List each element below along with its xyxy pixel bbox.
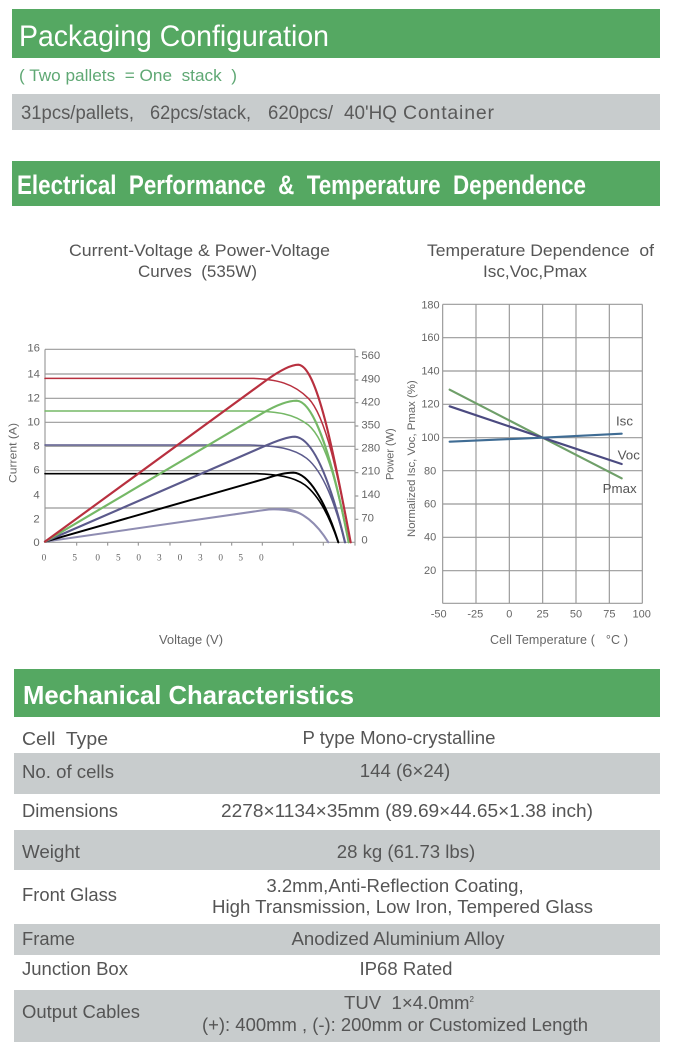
line: Voc <box>450 406 622 464</box>
axis title: normalized: Normalized Isc, Voc, Pmax (%) <box>406 380 418 537</box>
heading: packaging configuration: Packaging Configuration <box>19 20 329 53</box>
row: front glass: 3.2mm,Anti-Reflection Coating, <box>266 875 524 896</box>
left axis labels: 12 <box>27 393 40 405</box>
x axis labels: 75 <box>603 608 615 620</box>
chart title: temperature dependence <box>427 241 654 281</box>
row: output cables: Output Cables <box>22 1001 140 1022</box>
label: Pmax: Pmax <box>603 481 637 496</box>
chart title: current-voltage <box>69 241 330 281</box>
right axis labels: 560 <box>361 350 380 362</box>
grid <box>45 349 358 546</box>
x axis labels: 5 <box>72 553 77 563</box>
left axis labels: 16 <box>27 343 40 355</box>
y axis labels: 140 <box>421 365 440 377</box>
x axis labels: 50 <box>570 608 582 620</box>
row: front glass: Front Glass <box>22 884 117 905</box>
x axis labels: 0 <box>95 553 100 563</box>
chart title: current-voltage: Curves (535W) <box>138 262 257 281</box>
curve: black <box>45 473 338 542</box>
row: packing quantities: Container <box>403 102 494 124</box>
line: Isc <box>450 434 622 442</box>
right axis labels: 140 <box>361 489 380 501</box>
label: Voc: Voc <box>618 447 640 462</box>
right axis labels: 490 <box>361 373 380 385</box>
right axis labels: 70 <box>361 512 374 524</box>
text: pallet note: ( Two pallets = One stack ) <box>19 66 237 85</box>
y axis labels: 120 <box>421 399 440 411</box>
left axis labels: 8 <box>33 441 40 453</box>
x axis labels: 0 <box>218 553 223 563</box>
right axis labels: 350 <box>361 420 380 432</box>
right axis labels: 210 <box>361 466 380 478</box>
line chart: current-voltage and power-voltage curves <box>8 343 396 563</box>
chart title: temperature dependence: Temperature Dependence of <box>427 241 654 260</box>
row: cell type: Cell Type <box>22 728 108 749</box>
row: output cables: TUV 1×4.0mm <box>344 992 470 1013</box>
row: weight: Weight <box>22 841 81 862</box>
curve: red <box>45 365 351 542</box>
row: number of cells <box>14 753 660 794</box>
x axis labels: 0 <box>259 553 264 563</box>
row: packing quantities: 620pcs/ <box>268 102 334 124</box>
y axis labels: 40 <box>424 532 436 544</box>
right axis labels <box>361 350 380 547</box>
curve: purple <box>45 437 345 542</box>
panel: packaging configuration <box>12 9 660 130</box>
x axis labels: 3 <box>157 553 162 563</box>
axis title: current: Current (A) <box>8 423 20 483</box>
x axis labels: -25 <box>467 608 483 620</box>
line chart: temperature dependence <box>406 300 651 620</box>
chart title: current-voltage: Current-Voltage & Power-Voltage <box>69 241 330 260</box>
left axis labels: 2 <box>33 513 40 525</box>
row: packing quantities: 62pcs/stack, <box>150 102 251 124</box>
x axis labels: 25 <box>537 608 549 620</box>
row: output cables <box>14 990 660 1042</box>
row: dimensions <box>22 800 593 821</box>
grid <box>443 304 642 603</box>
x axis labels: 0 <box>506 608 512 620</box>
curve: 5th irradiance grey <box>45 509 328 542</box>
heading: mechanical characteristics: Mechanical Characteristics <box>23 680 354 710</box>
axis title: voltage: Voltage (V) <box>159 633 223 647</box>
left axis labels <box>27 343 40 549</box>
chart title: temperature dependence: Isc,Voc,Pmax <box>483 262 588 281</box>
row: cell type: P type Mono-crystalline <box>303 727 495 748</box>
row: frame: Frame <box>22 928 75 949</box>
x axis labels: 5 <box>116 553 121 563</box>
panel: mechanical characteristics <box>14 669 660 1042</box>
row: packing quantities: 40'HQ <box>344 102 397 124</box>
y axis labels <box>421 300 440 577</box>
axis title: power: Power (W) <box>384 428 396 480</box>
y axis labels: 100 <box>421 432 440 444</box>
label: Isc: Isc <box>616 414 633 429</box>
x axis labels: -50 <box>431 608 447 620</box>
row: junction box: Junction Box <box>22 958 129 979</box>
x axis labels: 100 <box>633 608 651 620</box>
heading: packaging configuration <box>12 9 660 58</box>
x axis labels: 0 <box>42 553 47 563</box>
y axis labels: 80 <box>424 465 436 477</box>
axis title: cell temperature: Cell Temperature ( °C ) <box>490 633 628 647</box>
left axis labels: 0 <box>33 537 40 549</box>
y axis labels: 60 <box>424 498 436 510</box>
left axis labels: 14 <box>27 369 40 381</box>
x axis labels: 5 <box>238 553 243 563</box>
row: output cables: 2 <box>470 995 475 1004</box>
row: packing quantities: 31pcs/pallets, <box>21 102 134 124</box>
row: front glass <box>22 875 593 917</box>
x axis labels: 0 <box>178 553 183 563</box>
heading: mechanical characteristics <box>14 669 660 717</box>
row: junction box: IP68 Rated <box>359 958 453 979</box>
y axis labels: 20 <box>424 565 436 577</box>
heading: electrical performance <box>12 161 660 206</box>
row: dimensions: Dimensions <box>22 800 118 821</box>
row: packing quantities <box>12 94 660 130</box>
row: output cables: (+): 400mm , (-): 200mm or Customized Length <box>202 1014 588 1035</box>
row: junction box <box>22 958 453 979</box>
row: frame <box>14 924 660 955</box>
row: number of cells: No. of cells <box>22 761 114 782</box>
right axis labels: 0 <box>361 535 368 547</box>
row: weight <box>14 830 660 870</box>
right axis labels: 420 <box>361 397 380 409</box>
x axis labels <box>431 608 651 620</box>
row: dimensions: 2278×1134×35mm (89.69×44.65×1.38 inch) <box>221 800 593 821</box>
right axis labels: 280 <box>361 442 380 454</box>
x axis labels <box>42 553 264 563</box>
row: cell type <box>22 727 495 749</box>
x axis labels: 0 <box>136 553 141 563</box>
row: frame: Anodized Aluminium Alloy <box>292 928 505 949</box>
row: number of cells: 144 (6×24) <box>360 760 450 781</box>
y axis labels: 180 <box>421 300 440 312</box>
y axis labels: 160 <box>421 332 440 344</box>
left axis labels: 6 <box>33 465 40 477</box>
left axis labels: 4 <box>33 489 40 501</box>
left axis labels: 10 <box>27 417 40 429</box>
row: weight: 28 kg (61.73 lbs) <box>337 841 475 862</box>
row: front glass: High Transmission, Low Iron, Tempered Glass <box>212 896 593 917</box>
x axis labels: 3 <box>198 553 203 563</box>
line: Pmax <box>450 390 622 478</box>
curve: green <box>45 401 349 542</box>
